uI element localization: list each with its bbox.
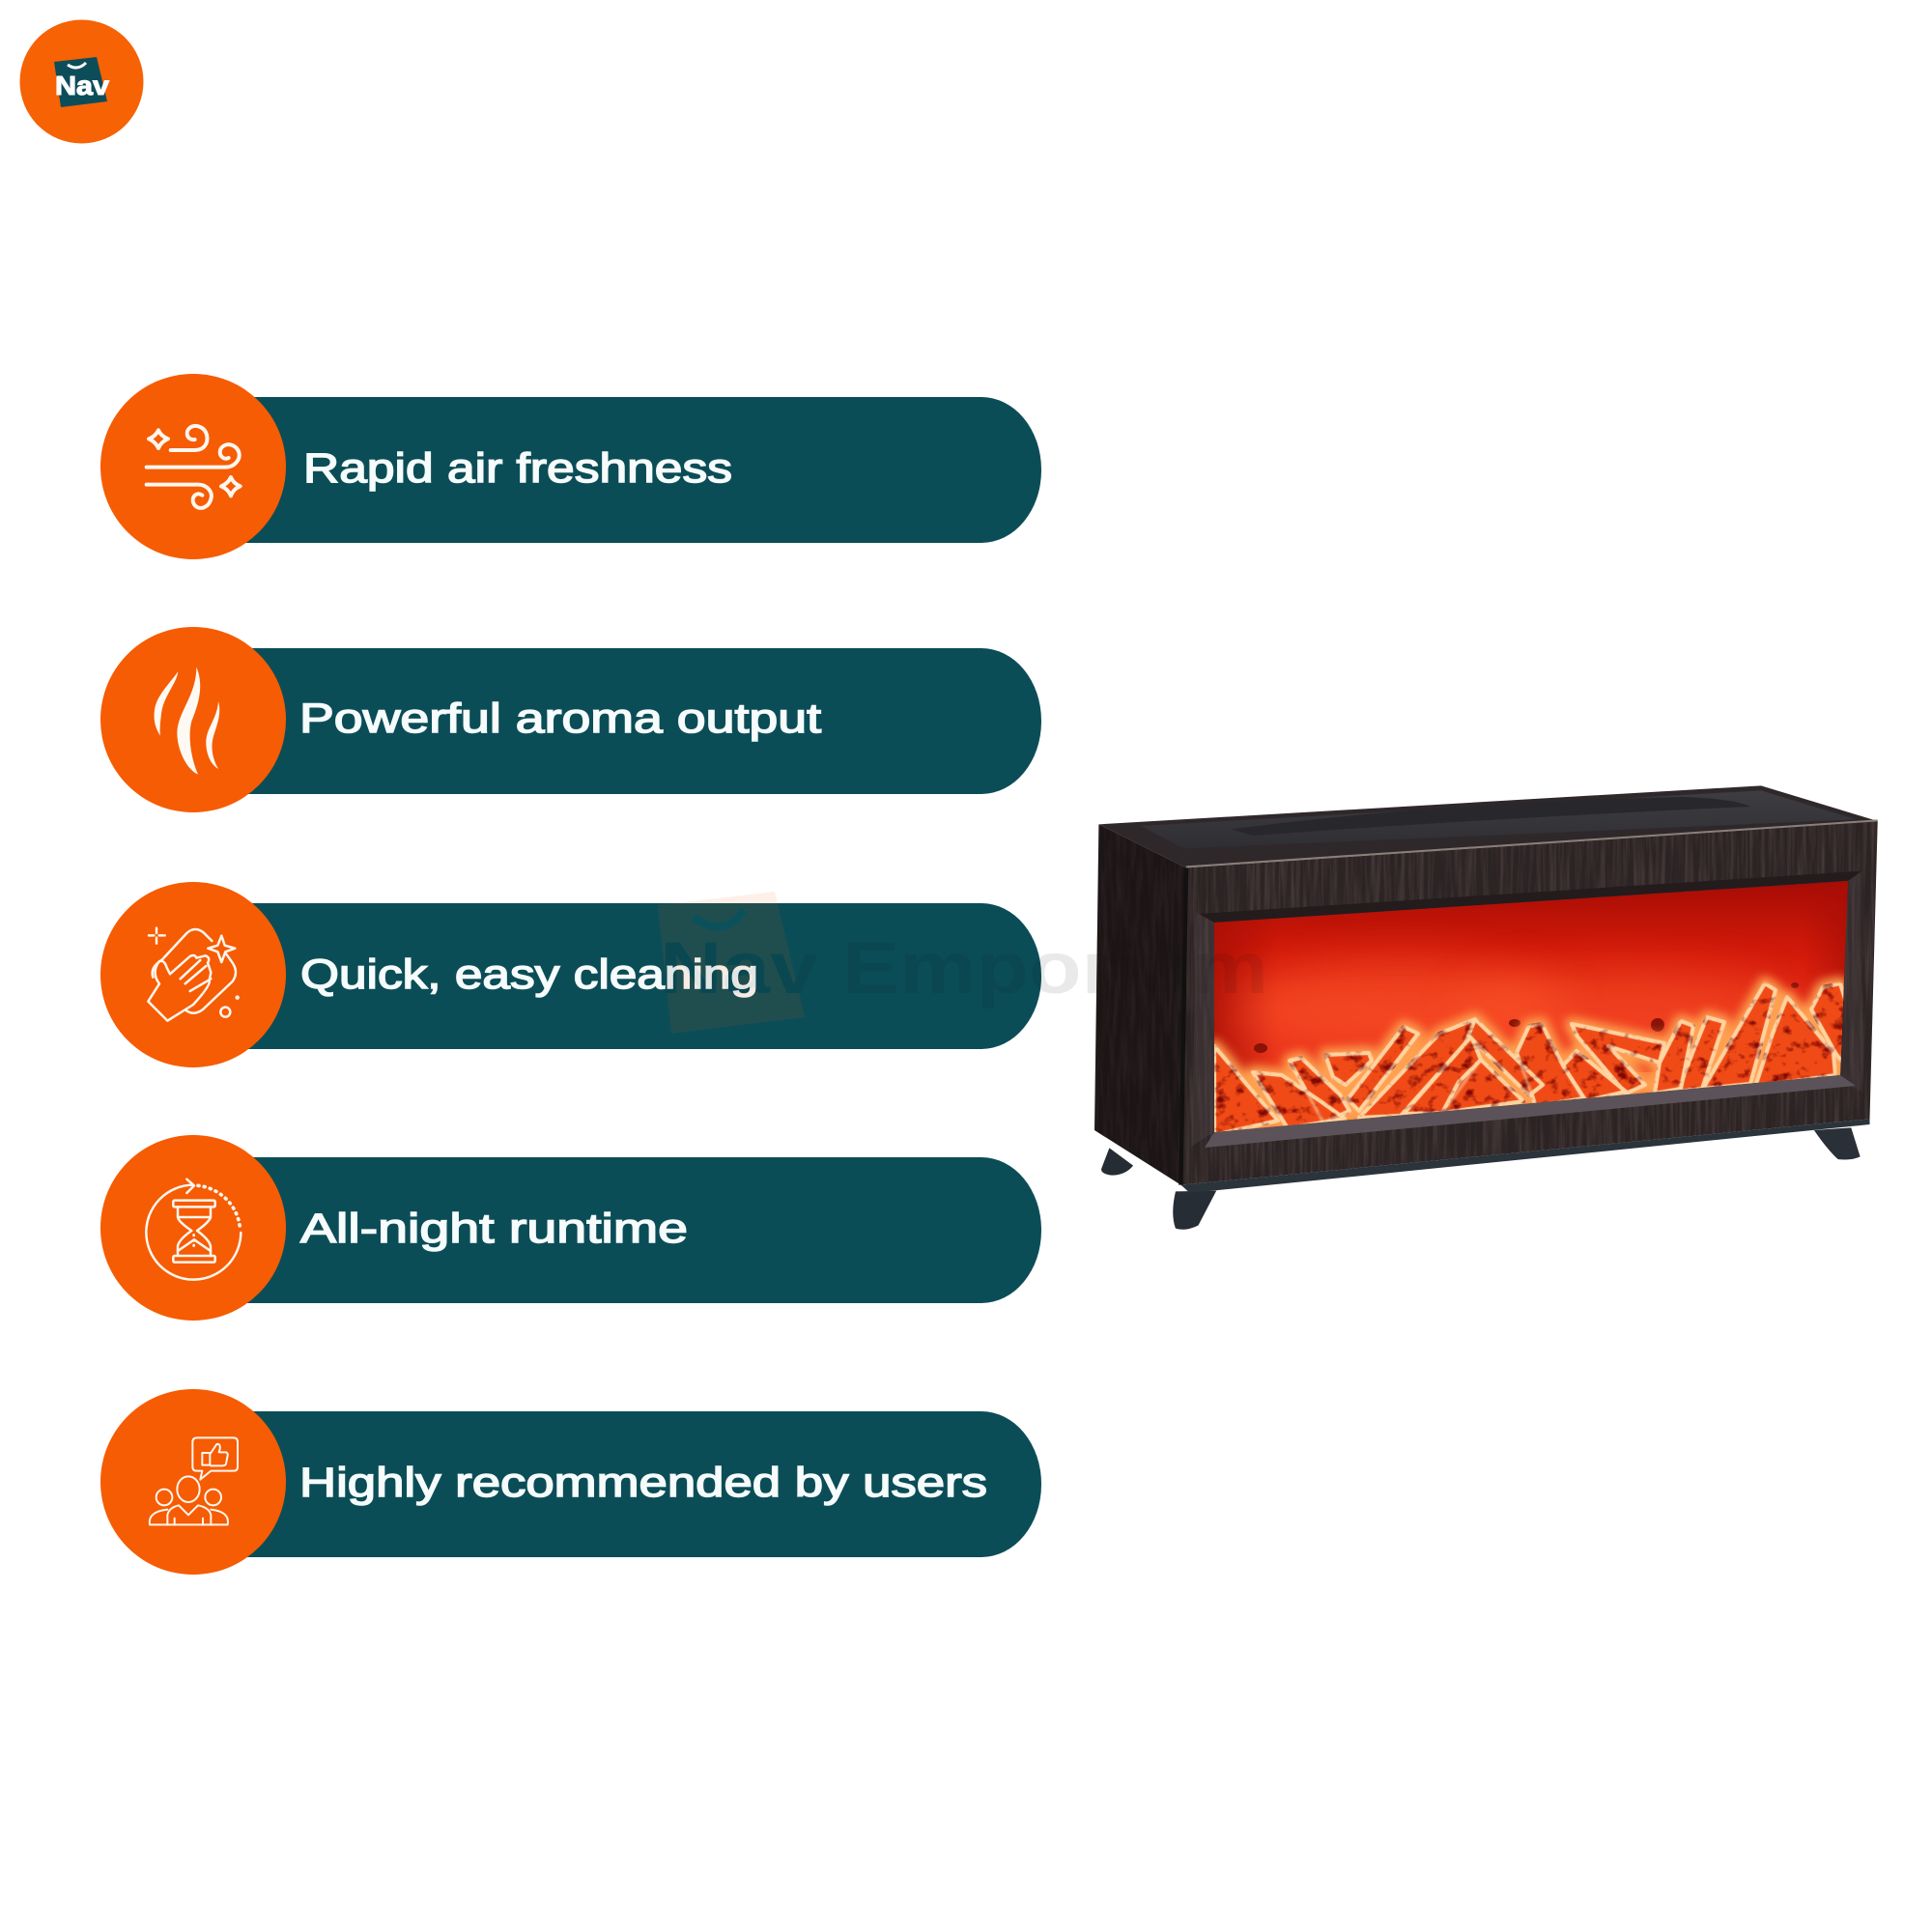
corner edge <box>1180 867 1186 1185</box>
log pile <box>1214 983 1850 1135</box>
frame top shadow <box>1200 871 1861 923</box>
watermark: Nav Emporium <box>658 892 1268 1034</box>
product: electric fireplace diffuser <box>1094 785 1878 1230</box>
icon: hourglass with circular arrow <box>146 1179 241 1280</box>
rear left foot <box>1101 1148 1133 1176</box>
label 2: Powerful aroma output <box>299 696 821 742</box>
feature row 1: rapid air freshness <box>100 374 1041 559</box>
frame side strips <box>1191 913 1214 1147</box>
watermark logo mark <box>658 892 805 1034</box>
ember bed <box>1249 1043 1841 1129</box>
feature row 4: all-night runtime <box>100 1135 1041 1321</box>
log glow <box>1214 983 1850 1135</box>
pill 4 <box>184 1157 1041 1303</box>
feature row 5: highly recommended by users <box>100 1389 1041 1575</box>
circle badge 1 <box>100 374 286 559</box>
second flame glow <box>1507 960 1753 1032</box>
icon: users with thumbs-up bubble <box>150 1437 238 1524</box>
log bright edges <box>1214 983 1850 1135</box>
icon: wind with sparkles <box>147 426 241 508</box>
pill 2 <box>184 648 1041 794</box>
icon: aroma flames <box>155 668 219 775</box>
watermark text: Nav Emporium <box>660 927 1268 1009</box>
top tray <box>1141 790 1857 848</box>
label 1: Rapid air freshness <box>303 445 732 492</box>
circle badge 3 <box>100 882 286 1067</box>
label 3: Quick, easy cleaning <box>300 952 758 998</box>
feature row 2: powerful aroma output <box>100 627 1041 812</box>
pill 5 <box>184 1411 1041 1557</box>
base strip <box>1180 1119 1869 1193</box>
label 4: All-night runtime <box>300 1206 688 1252</box>
embers <box>1254 982 1799 1053</box>
fireplace body <box>1094 785 1878 1230</box>
frame right strip <box>1840 871 1861 1092</box>
fire window <box>1214 881 1848 1132</box>
label 5: Highly recommended by users <box>299 1460 987 1506</box>
top vent trough <box>1232 797 1750 836</box>
front left foot <box>1173 1191 1216 1230</box>
top surface <box>1098 785 1878 867</box>
flame glow <box>1236 961 1565 1048</box>
feature row 3: quick, easy cleaning <box>100 882 1041 1067</box>
side shading <box>1214 881 1848 1070</box>
logo: Nav badge <box>19 19 143 143</box>
front panel <box>1180 821 1878 1185</box>
logo: Nav badge: Nav <box>55 71 109 100</box>
fire scene <box>1214 874 1850 1140</box>
left side panel <box>1094 824 1186 1185</box>
circle badge 5 <box>100 1389 286 1575</box>
watermark logo smile <box>694 910 744 926</box>
circle badge 2 <box>100 627 286 812</box>
pill 1 <box>184 397 1041 543</box>
pill 3 <box>184 903 1041 1049</box>
icon: hand wiping with cloth <box>148 928 239 1021</box>
top edge highlight <box>1186 820 1878 867</box>
circle badge 4 <box>100 1135 286 1321</box>
right foot <box>1814 1127 1861 1159</box>
frame bottom bevel <box>1205 1075 1856 1148</box>
